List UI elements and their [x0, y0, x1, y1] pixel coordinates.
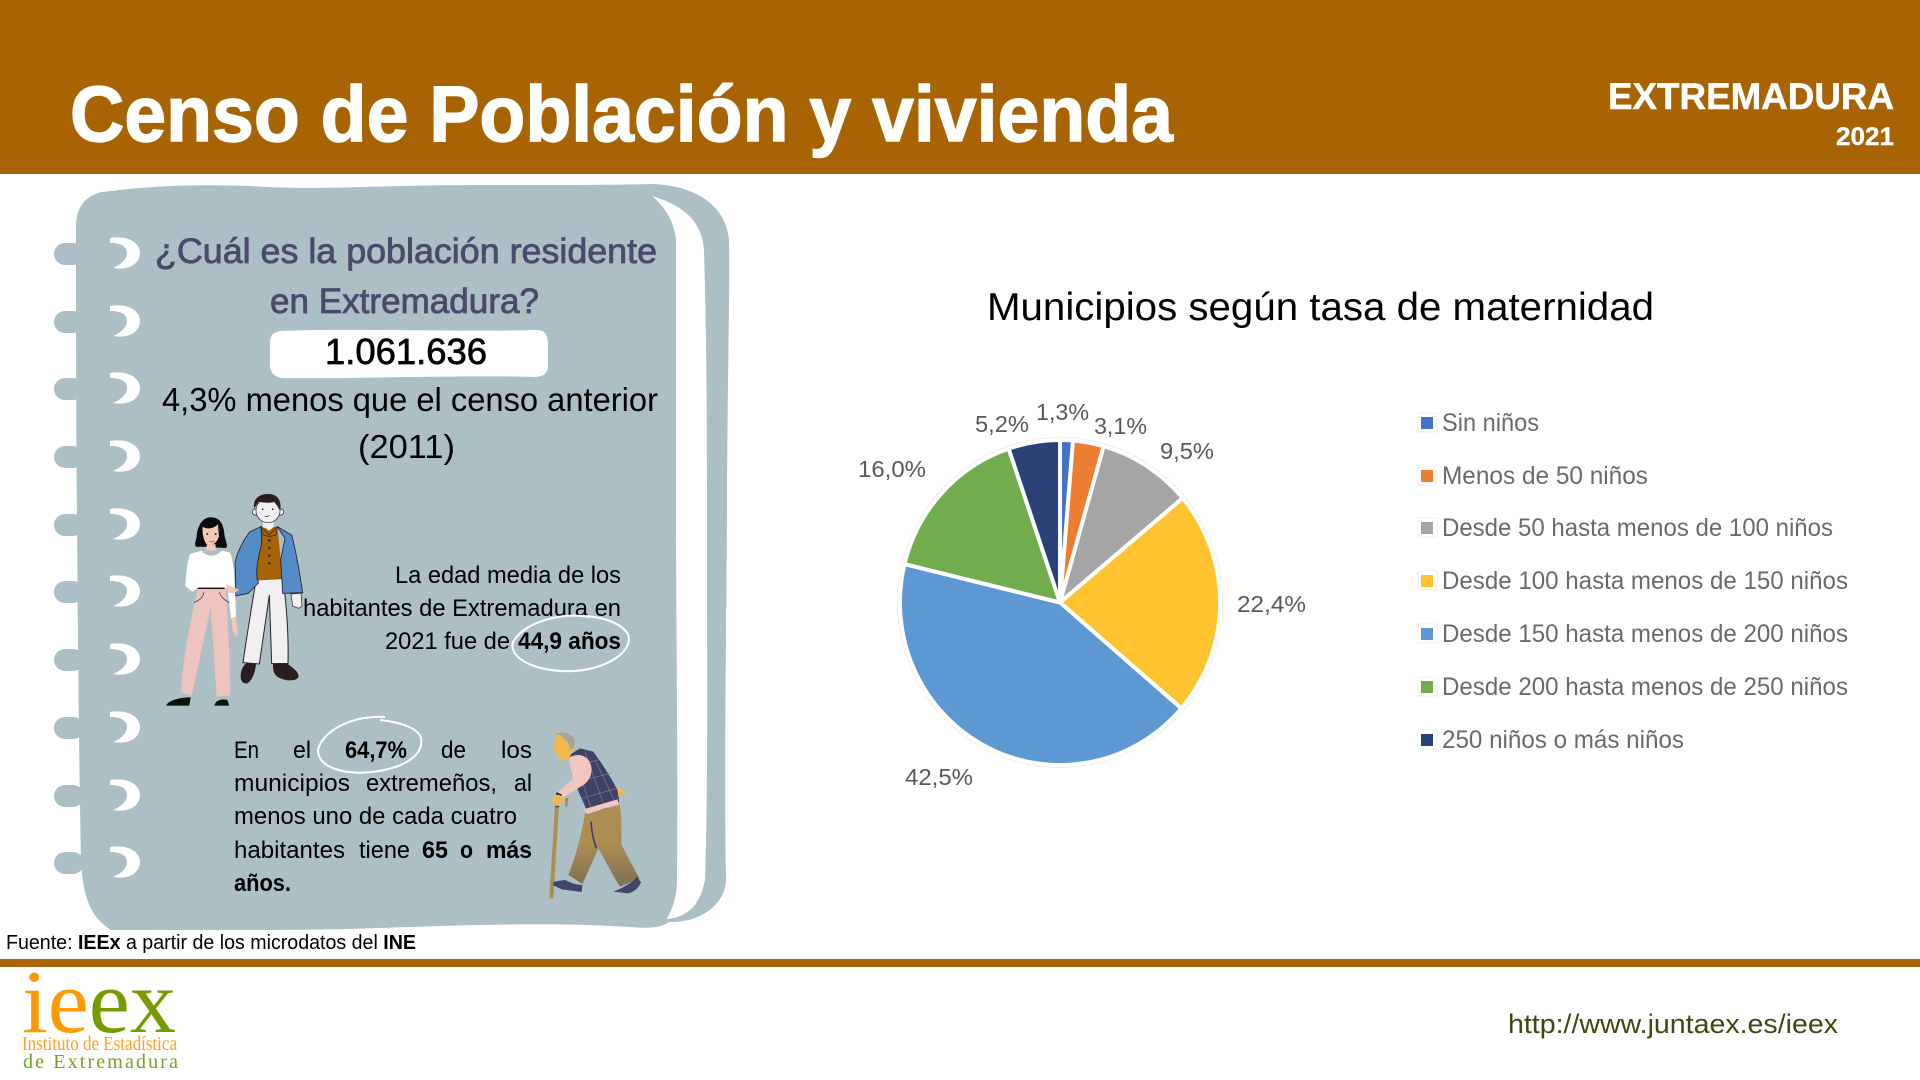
header band	[0, 0, 1920, 174]
pie data labels: 22,4%	[1237, 591, 1306, 617]
logo caption line 2: de Extremadura	[23, 1051, 178, 1073]
slice: 200 a 250	[905, 449, 1060, 602]
pie data labels: 42,5%	[905, 764, 973, 790]
question heading	[155, 232, 657, 321]
comparison with previous census	[162, 381, 658, 465]
slice: menos de 50	[1060, 441, 1104, 602]
hand-drawn circle: 44,9 años	[512, 616, 629, 671]
comparison with previous census: 4,3% menos que el censo anterior	[162, 381, 658, 418]
legend: 200 a 250: Desde 200 hasta menos de 250 niños	[1442, 673, 1848, 701]
pie data labels: 1,3%	[1036, 399, 1089, 425]
white page edge	[652, 196, 707, 919]
notebook body	[76, 184, 729, 930]
pie chart	[858, 399, 1306, 790]
illustration: elderly man	[549, 732, 641, 898]
logo caption line 1: Instituto de Estadística	[22, 1033, 177, 1055]
municipalities text: 65	[422, 837, 448, 864]
pie data labels: 5,2%	[975, 411, 1029, 437]
municipalities text: más	[486, 837, 532, 864]
municipalities text: habitantes	[234, 837, 345, 864]
population value	[270, 330, 548, 378]
median age text	[303, 562, 621, 655]
municipalities text: tiene	[359, 837, 410, 864]
title: Censo de Población y vivienda	[70, 69, 1174, 158]
slice: 100 a 150	[1060, 498, 1220, 708]
hand-drawn circle: 64,7%	[318, 717, 421, 773]
legend: 150 a 200: Desde 150 hasta menos de 200 niños	[1442, 620, 1848, 648]
region label: EXTREMADURA	[1608, 76, 1894, 117]
legend: sin niños: Sin niños	[1442, 409, 1539, 437]
legend: 100 a 150: Desde 100 hasta menos de 150 niños	[1442, 567, 1848, 595]
municipalities text: municipios	[234, 770, 350, 797]
spiral binding rings	[110, 237, 140, 878]
slice: 50 a 100	[1060, 446, 1183, 602]
question heading: en Extremadura?	[270, 282, 539, 321]
municipalities text: de	[441, 737, 466, 764]
legend: 250 o más: 250 niños o más niños	[1442, 726, 1684, 754]
population value: 1.061.636	[325, 331, 487, 372]
municipalities text: 64,7%	[345, 737, 407, 764]
median age text: 2021 fue de	[385, 628, 510, 655]
municipalities text: el	[293, 737, 311, 764]
municipalities text: años.	[234, 870, 291, 897]
spiral binding tabs	[54, 243, 84, 874]
pie data labels	[858, 399, 1306, 790]
slice: 150 a 200	[900, 564, 1181, 765]
chart title: Municipios según tasa de maternidad	[987, 286, 1654, 329]
source note: Fuente: IEEx a partir de los microdatos del INE	[6, 932, 416, 954]
question heading: ¿Cuál es la población residente	[155, 232, 657, 271]
pie data labels: 16,0%	[858, 456, 926, 482]
man	[235, 494, 303, 683]
slice: 250 o más	[1009, 440, 1060, 602]
logo: ieex: ieex	[22, 953, 176, 1052]
municipalities text: En	[234, 737, 259, 764]
median age text: La edad media de los	[395, 562, 621, 589]
woman	[166, 517, 239, 706]
panel: notebook	[54, 184, 729, 930]
pie data labels: 9,5%	[1160, 438, 1214, 464]
year label: 2021	[1836, 123, 1894, 151]
website url: http://www.juntaex.es/ieex	[1508, 1009, 1839, 1039]
municipalities text: extremeños,	[366, 770, 497, 797]
municipalities text: al	[514, 770, 532, 797]
legend: menos de 50: Menos de 50 niños	[1442, 462, 1648, 490]
comparison with previous census: (2011)	[358, 428, 455, 465]
municipalities text: los	[501, 737, 532, 764]
municipalities text	[234, 737, 532, 897]
median age text: 44,9 años	[518, 628, 621, 655]
legend: 50 a 100: Desde 50 hasta menos de 100 niños	[1442, 514, 1833, 542]
pie data labels: 3,1%	[1094, 413, 1147, 439]
municipalities text: menos uno de cada cuatro	[234, 803, 517, 830]
slice: sin niños	[1060, 440, 1073, 602]
municipalities text: o	[460, 837, 473, 864]
illustration: couple	[166, 494, 303, 706]
chart legend	[1418, 409, 1848, 754]
footer divider	[0, 959, 1920, 967]
median age text: habitantes de Extremadura en	[303, 595, 621, 622]
